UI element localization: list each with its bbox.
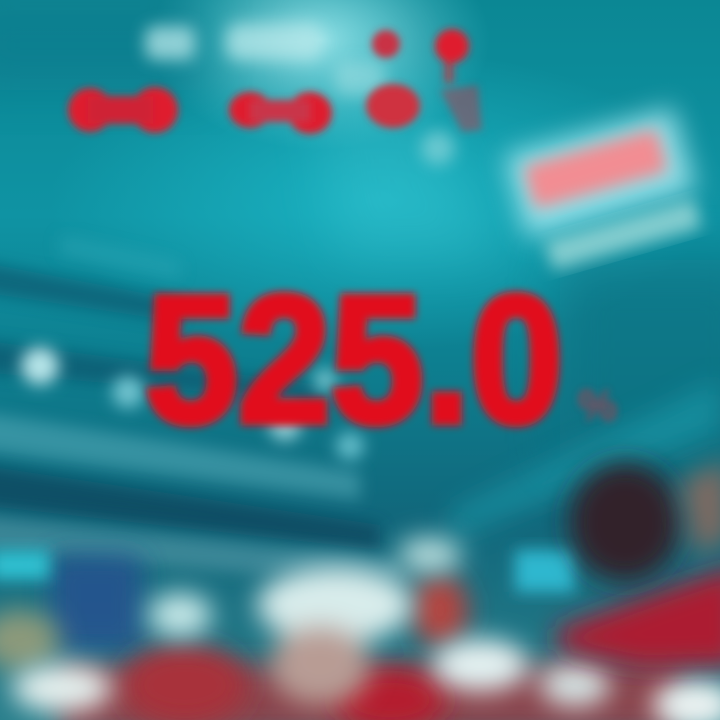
heading: red words	[68, 29, 482, 134]
card highlight strip	[523, 129, 668, 209]
heading: white words	[145, 24, 455, 165]
stadium lights	[21, 347, 364, 460]
person: arm	[680, 460, 720, 555]
callout card	[504, 107, 707, 275]
stadium tiers	[0, 235, 720, 585]
card body	[504, 107, 696, 238]
number suffix: %	[578, 381, 617, 430]
person: head	[569, 462, 681, 582]
person: shirt	[555, 565, 720, 668]
crowd: foreground person	[555, 460, 720, 668]
crowd: red figures	[0, 574, 468, 720]
crowd: dark base	[60, 665, 680, 720]
crowd: cyan patches	[0, 550, 575, 592]
card subtext strip	[545, 199, 702, 270]
crowd	[0, 460, 720, 720]
big number: 525.0	[145, 257, 563, 461]
crowd: blue figure	[50, 555, 142, 650]
crowd: white caps	[12, 537, 720, 720]
heading: blurred top text	[68, 24, 482, 165]
